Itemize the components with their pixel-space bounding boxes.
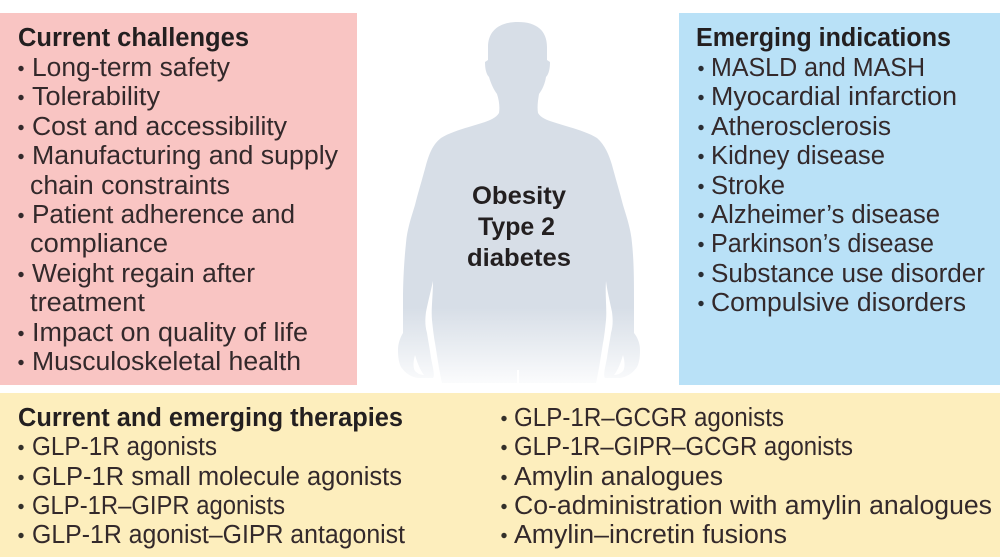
list: challenges: treatment <box>30 289 145 317</box>
list: therapies left column: GLP-1R–GIPR agonists <box>32 492 285 520</box>
list: therapies right column: Amylin analogues <box>514 463 723 491</box>
panel: current and emerging therapies <box>0 393 1000 557</box>
list: challenges: compliance <box>30 230 168 258</box>
list: therapies left column: GLP-1R agonists <box>32 433 217 461</box>
list: indications: Alzheimer’s disease <box>711 201 940 229</box>
label: conditions <box>467 182 571 272</box>
list: indications <box>698 54 986 317</box>
label: conditions: Obesity <box>472 182 566 210</box>
heading: current and emerging therapies: Current and emerging therapies <box>18 404 403 432</box>
list: challenges: chain constraints <box>30 172 230 200</box>
list: challenges: Musculoskeletal health <box>32 348 301 376</box>
list: therapies right column <box>501 404 992 549</box>
list: therapies left column: GLP-1R small molecule agonists <box>32 463 402 491</box>
icon: human silhouette <box>398 22 640 383</box>
list: indications: Stroke <box>711 172 785 200</box>
panel: emerging indications <box>679 13 1000 385</box>
list: challenges: Patient adherence and <box>32 201 295 229</box>
list: challenges: Long-term safety <box>32 54 230 82</box>
list: indications: Parkinson’s disease <box>711 230 934 258</box>
list: therapies left column <box>18 433 405 549</box>
panel: current challenges <box>0 13 357 385</box>
label: conditions: diabetes <box>467 244 571 272</box>
list: indications: Compulsive disorders <box>711 289 966 317</box>
list: therapies left column: GLP-1R agonist–GIPR antagonist <box>32 521 405 549</box>
heading: emerging indications: Emerging indications <box>696 24 951 52</box>
label: conditions: Type 2 <box>478 213 555 241</box>
list: therapies right column: Co-administration with amylin analogues <box>514 492 992 520</box>
list: challenges: Weight regain after <box>32 260 256 288</box>
list: challenges: Cost and accessibility <box>32 113 287 141</box>
list: indications: Myocardial infarction <box>711 83 957 111</box>
list: indications: Substance use disorder <box>711 260 986 288</box>
list: challenges: Manufacturing and supply <box>32 142 338 170</box>
list: indications: Atherosclerosis <box>711 113 891 141</box>
list: challenges: Tolerability <box>32 83 160 111</box>
heading: current challenges: Current challenges <box>18 24 249 52</box>
list: therapies right column: Amylin–incretin fusions <box>514 521 787 549</box>
list: therapies right column: GLP-1R–GIPR–GCGR agonists <box>514 433 853 461</box>
list: challenges <box>18 54 338 376</box>
list: indications: MASLD and MASH <box>711 54 925 82</box>
list: indications: Kidney disease <box>711 142 885 170</box>
list: challenges: Impact on quality of life <box>32 319 308 347</box>
list: therapies right column: GLP-1R–GCGR agonists <box>514 404 784 432</box>
